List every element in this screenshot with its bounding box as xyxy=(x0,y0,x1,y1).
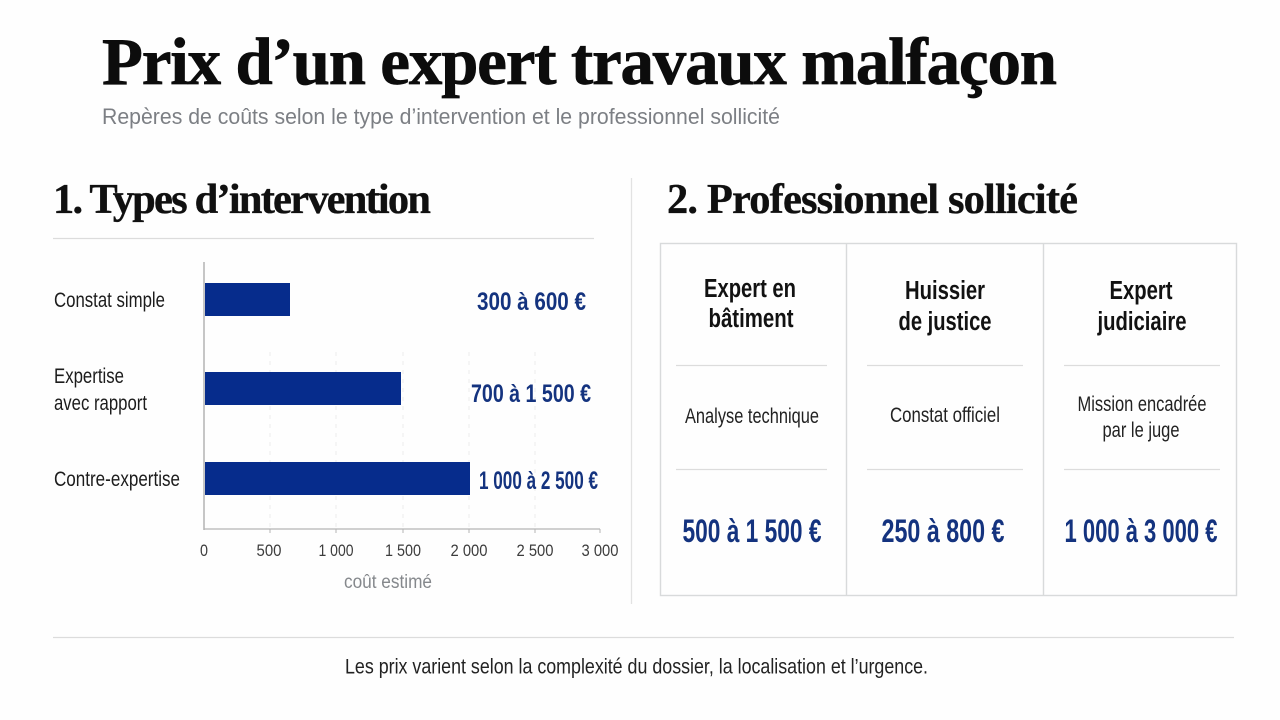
bar chart xyxy=(54,262,618,593)
column: expert judiciaire: Mission encadrée xyxy=(1078,392,1206,416)
column: expert en bâtiment: bâtiment xyxy=(708,305,794,333)
column: expert en bâtiment xyxy=(682,275,822,549)
heading: types d'intervention: 1. Types d’intervention xyxy=(53,176,431,223)
column: expert judiciaire: par le juge xyxy=(1102,418,1180,442)
subtitle: Repères de coûts selon le type d’intervention et le professionnel sollicité xyxy=(102,104,780,129)
footnote: Les prix varient selon la complexité du dossier, la localisation et l’urgence. xyxy=(345,656,928,678)
column: huissier de justice: de justice xyxy=(898,308,992,336)
axis labels: 3 000 xyxy=(582,541,618,560)
row: expertise avec rapport: Expertise xyxy=(54,364,124,388)
row: constat simple xyxy=(54,283,586,316)
column: expert en bâtiment: 500 à 1 500 € xyxy=(682,513,822,549)
column: huissier de justice: Constat officiel xyxy=(890,403,1000,427)
row: contre-expertise xyxy=(54,462,598,495)
row: constat simple: 300 à 600 € xyxy=(477,288,586,316)
title: Prix d’un expert travaux malfaçon xyxy=(102,25,1057,99)
axis labels: 2 000 xyxy=(450,541,488,560)
column: huissier de justice: 250 à 800 € xyxy=(882,513,1005,549)
row: expertise avec rapport xyxy=(54,364,591,415)
axis labels: 500 xyxy=(256,541,282,560)
axis labels: 2 500 xyxy=(516,541,554,560)
column: expert en bâtiment: Analyse technique xyxy=(685,404,819,428)
panel: types d'intervention xyxy=(53,176,618,593)
panel: professionnel sollicité xyxy=(660,176,1236,596)
row: expertise avec rapport: avec rapport xyxy=(54,391,147,415)
heading: professionnel sollicité: 2. Professionnel sollicité xyxy=(667,176,1078,223)
row: contre-expertise: Contre-expertise xyxy=(54,467,180,491)
axis labels: 1 500 xyxy=(385,541,421,560)
row: contre-expertise: 1 000 à 2 500 € xyxy=(479,467,598,495)
column: huissier de justice xyxy=(882,277,1005,549)
table frame xyxy=(660,243,1236,596)
axis labels: 0 xyxy=(200,541,208,560)
column: huissier de justice: Huissier xyxy=(905,277,985,305)
column: expert judiciaire xyxy=(1064,277,1218,549)
column: expert en bâtiment: Expert en xyxy=(704,275,796,303)
row: expertise avec rapport: 700 à 1 500 € xyxy=(471,380,591,408)
row: constat simple: Constat simple xyxy=(54,288,165,312)
column: expert judiciaire: Expert xyxy=(1110,277,1173,305)
column: expert judiciaire: judiciaire xyxy=(1097,308,1186,336)
axis labels xyxy=(200,541,618,560)
axis labels: 1 000 xyxy=(318,541,354,560)
axis title: coût estimé xyxy=(344,572,432,593)
